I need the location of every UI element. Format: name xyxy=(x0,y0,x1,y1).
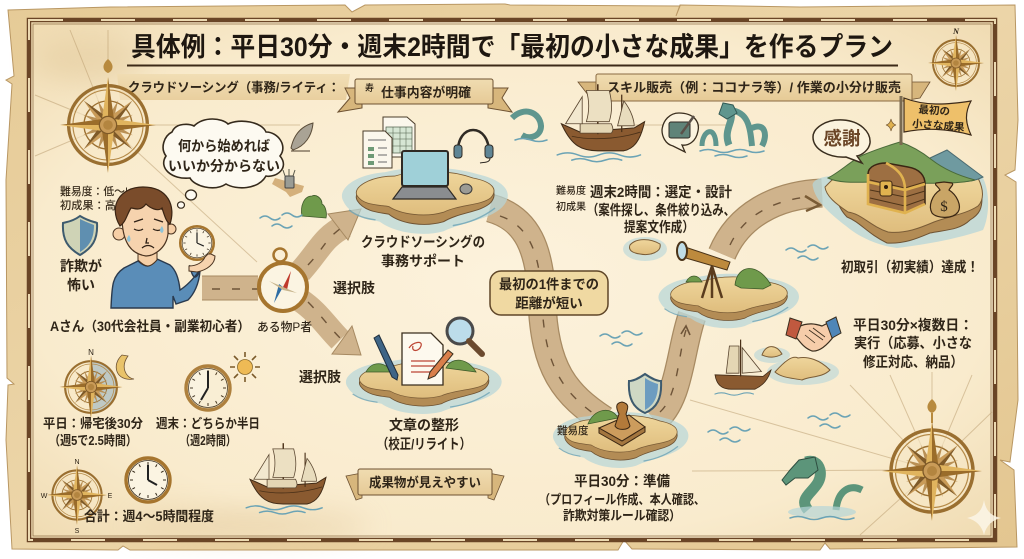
compass: bottom right large xyxy=(882,399,982,521)
label pill: short distance xyxy=(490,271,608,315)
compass: bottom left: N xyxy=(74,459,80,466)
compass: bottom left: W xyxy=(41,493,48,500)
weekend step text xyxy=(587,184,735,235)
step text: execute: 修正対応、納品） xyxy=(863,354,963,370)
label: proofreading: 文章の整形 xyxy=(389,417,459,433)
flag: first small result: 小さな成果 xyxy=(912,117,965,134)
difficulty label overlapped: 難易度 xyxy=(556,184,586,197)
speech bubble: thanks: 感謝 xyxy=(823,128,861,149)
achievement label: 初取引（初実績）達成！ xyxy=(841,259,979,275)
compass: bottom left: S xyxy=(75,528,80,535)
thought cloud: 何から始めれば xyxy=(178,138,270,154)
label: proofreading xyxy=(377,417,471,452)
compass: top right: N xyxy=(952,27,960,36)
weekday text xyxy=(43,416,143,448)
main winding road xyxy=(490,193,822,420)
icon: weekend clock and sun xyxy=(186,352,260,410)
weekend step text: （案件探し、条件絞り込み、 xyxy=(587,202,735,218)
label pill: short distance: 距離が短い xyxy=(515,295,583,311)
label: office support: クラウドソーシングの xyxy=(361,234,485,250)
sparkle watermark xyxy=(967,500,1001,535)
weekend text: （週2時間） xyxy=(180,433,236,448)
step text: prepare: （プロフィール作成、本人確認、 xyxy=(539,492,705,507)
ship: top center xyxy=(557,84,645,162)
road: start with branches xyxy=(202,209,361,355)
waves near desk xyxy=(260,213,302,228)
total text: 合計：週4〜5時間程度 xyxy=(84,508,214,524)
ship: bottom left xyxy=(246,443,326,514)
compass: center pocket xyxy=(259,248,307,311)
Mr. A label: ある物P者 xyxy=(257,319,312,334)
sea dragon: bottom xyxy=(782,457,862,520)
difficulty text left xyxy=(60,184,128,212)
island: treasure: $ xyxy=(940,199,948,215)
label: proofreading: （校正/リライト） xyxy=(377,436,471,452)
thought cloud: いいか分からない xyxy=(168,158,280,174)
small difficulty label: 難易度 xyxy=(557,424,589,437)
step text: prepare: 平日30分：準備 xyxy=(574,473,670,489)
weekend step text: 週末2時間：選定・設計 xyxy=(590,184,732,200)
speech bubble with tablet xyxy=(662,113,698,152)
small desk and bush xyxy=(272,169,326,218)
Mr. A label: Aさん（30代会社員・副業初心者） xyxy=(50,318,250,334)
island: telescope xyxy=(658,242,799,328)
person: worried Mr. A xyxy=(111,187,215,308)
label: option bottom: 選択肢 xyxy=(299,369,341,385)
weekend text xyxy=(156,416,260,448)
label pill: short distance: 最初の1件までの xyxy=(499,276,599,292)
compass: bottom left xyxy=(41,459,113,535)
weekend text: 週末：どちらか半日 xyxy=(156,416,260,431)
step text: execute: 実行（応募、小さな xyxy=(854,335,972,351)
sea dragon: top right xyxy=(700,103,765,158)
weekend step text: 提案文作成） xyxy=(624,219,694,235)
difficulty label overlapped xyxy=(556,184,586,213)
scam fear text xyxy=(60,258,102,293)
icon: shield left xyxy=(63,216,97,255)
banner: crowdsourcing xyxy=(117,74,350,100)
waves mid xyxy=(600,331,850,442)
step text: execute xyxy=(853,317,973,370)
scam fear text: 詐欺が xyxy=(60,258,102,274)
speech bubble: thanks xyxy=(813,120,870,163)
difficulty label overlapped: 初成果 xyxy=(556,200,586,213)
icon: shield center xyxy=(629,374,661,413)
icon: handshake xyxy=(786,317,841,351)
title: 具体例：平日30分・週末2時間で「最初の小さな成果」を作るプラン xyxy=(131,32,893,62)
feather quill icon xyxy=(291,123,313,151)
small sail ship xyxy=(715,340,771,395)
thought cloud xyxy=(163,119,283,208)
label: office support xyxy=(361,234,485,269)
ribbon: visible output xyxy=(346,469,504,500)
clock: bottom left xyxy=(126,458,170,502)
sparkle near flag xyxy=(886,119,896,131)
banner: skill sale xyxy=(578,74,930,102)
island: office support xyxy=(342,117,508,234)
step text: execute: 平日30分×複数日： xyxy=(853,317,973,333)
island: treasure xyxy=(813,142,988,248)
small islands xyxy=(754,347,839,385)
weekday text: 平日：帰宅後30分 xyxy=(43,416,143,431)
weekday text: （週5で2.5時間） xyxy=(49,433,137,448)
flag: first small result xyxy=(901,96,971,145)
difficulty text left: 初成果：高 xyxy=(60,198,116,212)
step text: prepare xyxy=(539,473,705,523)
compass: top right xyxy=(928,27,984,91)
icon: weekday compass and moon: N xyxy=(88,348,94,357)
ribbon: clear job description: 寿 xyxy=(365,82,374,93)
ribbon: visible output: 成果物が見えやすい xyxy=(369,475,481,490)
banner: skill sale: スキル販売（例：ココナラ等）/ 作業の小分け販売 xyxy=(607,80,901,95)
icon: weekday compass and moon xyxy=(60,348,134,418)
island: proofreading xyxy=(346,318,502,414)
scam fear text: 怖い xyxy=(67,277,95,293)
ribbon: clear job description xyxy=(338,79,512,112)
waves near telescope xyxy=(786,245,828,260)
flag: first small result: 最初の xyxy=(918,103,950,118)
island: stamp xyxy=(553,402,688,468)
sea dragon: partial top xyxy=(512,112,547,142)
compass: bottom left: E xyxy=(108,493,113,500)
compass: top left xyxy=(60,59,156,173)
step text: prepare: 詐欺対策ルール確認） xyxy=(563,508,681,523)
difficulty text left: 難易度：低〜! xyxy=(60,184,128,198)
small rock island xyxy=(623,237,667,261)
banner: crowdsourcing: クラウドソーシング（事務/ライティ： xyxy=(128,80,340,95)
label: office support: 事務サポート xyxy=(381,253,465,269)
ribbon: clear job description: 仕事内容が明確 xyxy=(381,85,471,100)
label: option top: 選択肢 xyxy=(333,280,375,296)
